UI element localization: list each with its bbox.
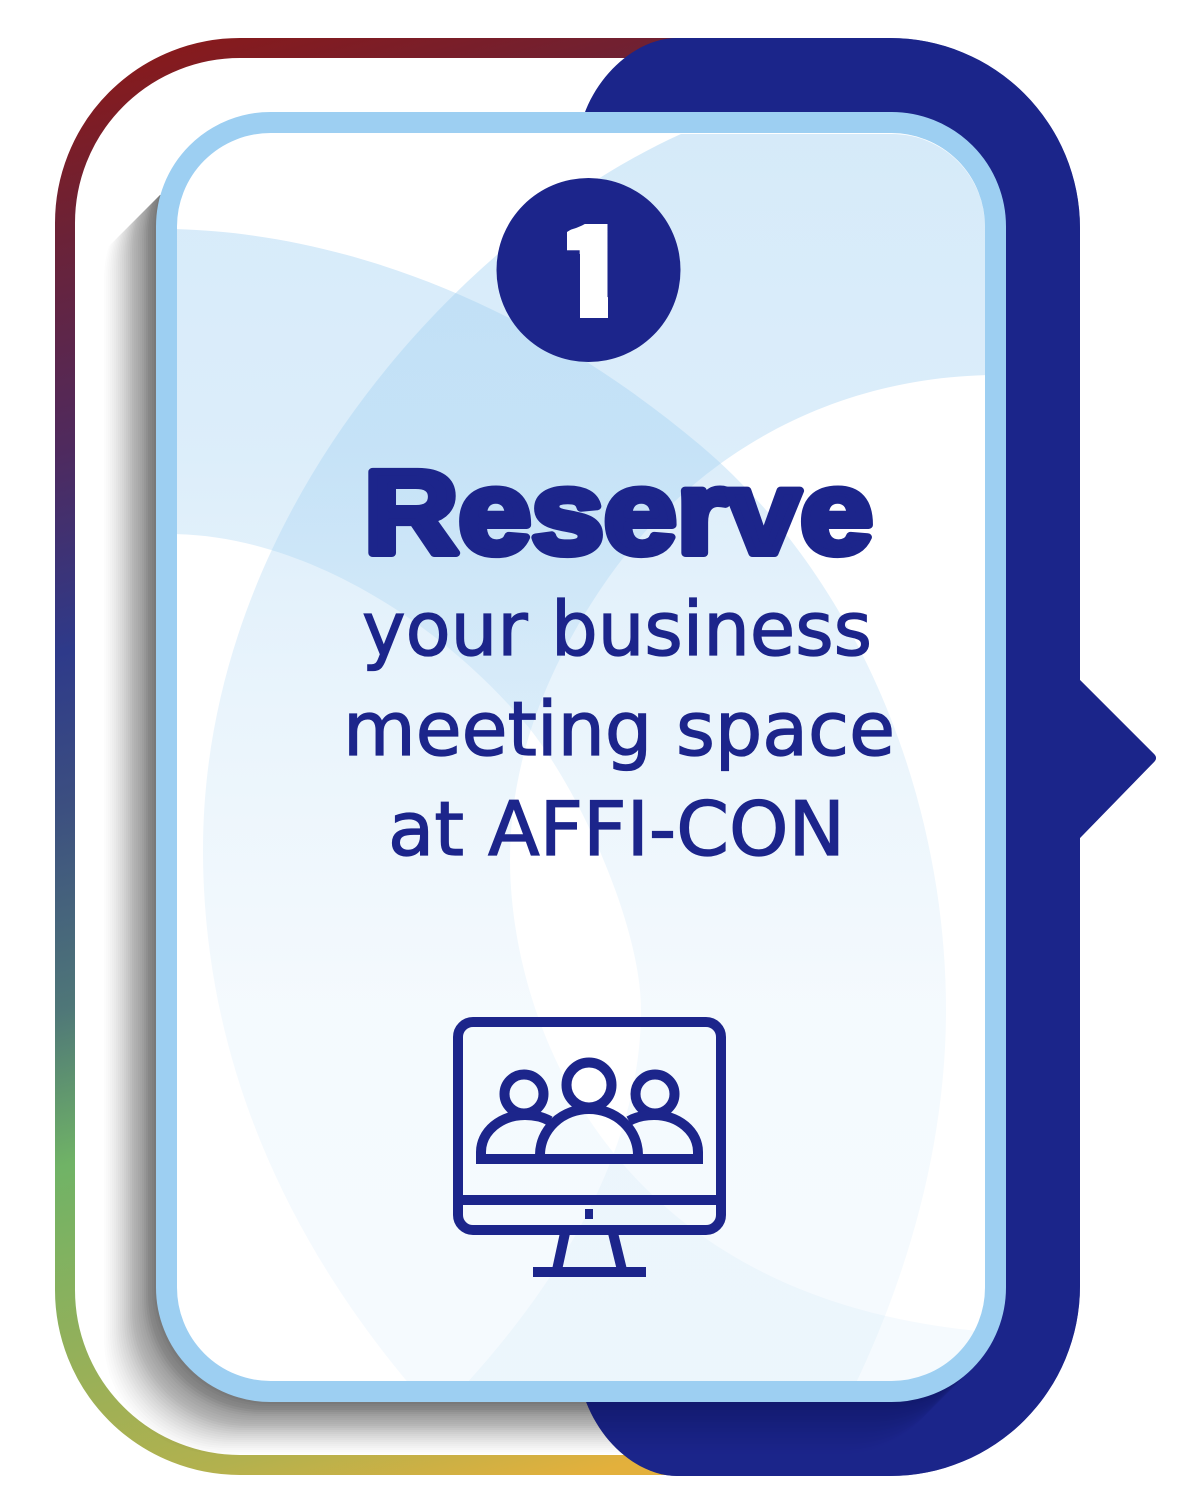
monitor body <box>458 1022 721 1230</box>
people heads <box>504 1062 674 1114</box>
card drop shadow <box>108 195 962 1450</box>
icon: monitor with three people <box>458 1022 721 1272</box>
step number badge <box>496 170 680 362</box>
body text: at AFFI-CON <box>388 785 845 873</box>
main card panel <box>166 122 996 1392</box>
navy tint softening the shadow over the panel <box>584 38 1156 1476</box>
gradient outline frame <box>65 48 965 1465</box>
monitor bezel line <box>458 1195 721 1205</box>
people bodies <box>476 1109 703 1160</box>
body text: your business <box>362 585 872 673</box>
card background arcs <box>170 130 990 1385</box>
heading: Reserve: Reserve <box>364 447 873 579</box>
monitor power dot <box>585 1209 593 1219</box>
body text <box>343 585 895 873</box>
navy backing panel with right-pointing arrow <box>584 38 1156 1476</box>
step number badge: 1 <box>552 170 630 355</box>
monitor stand <box>533 1233 646 1272</box>
body text: meeting space <box>343 685 895 773</box>
